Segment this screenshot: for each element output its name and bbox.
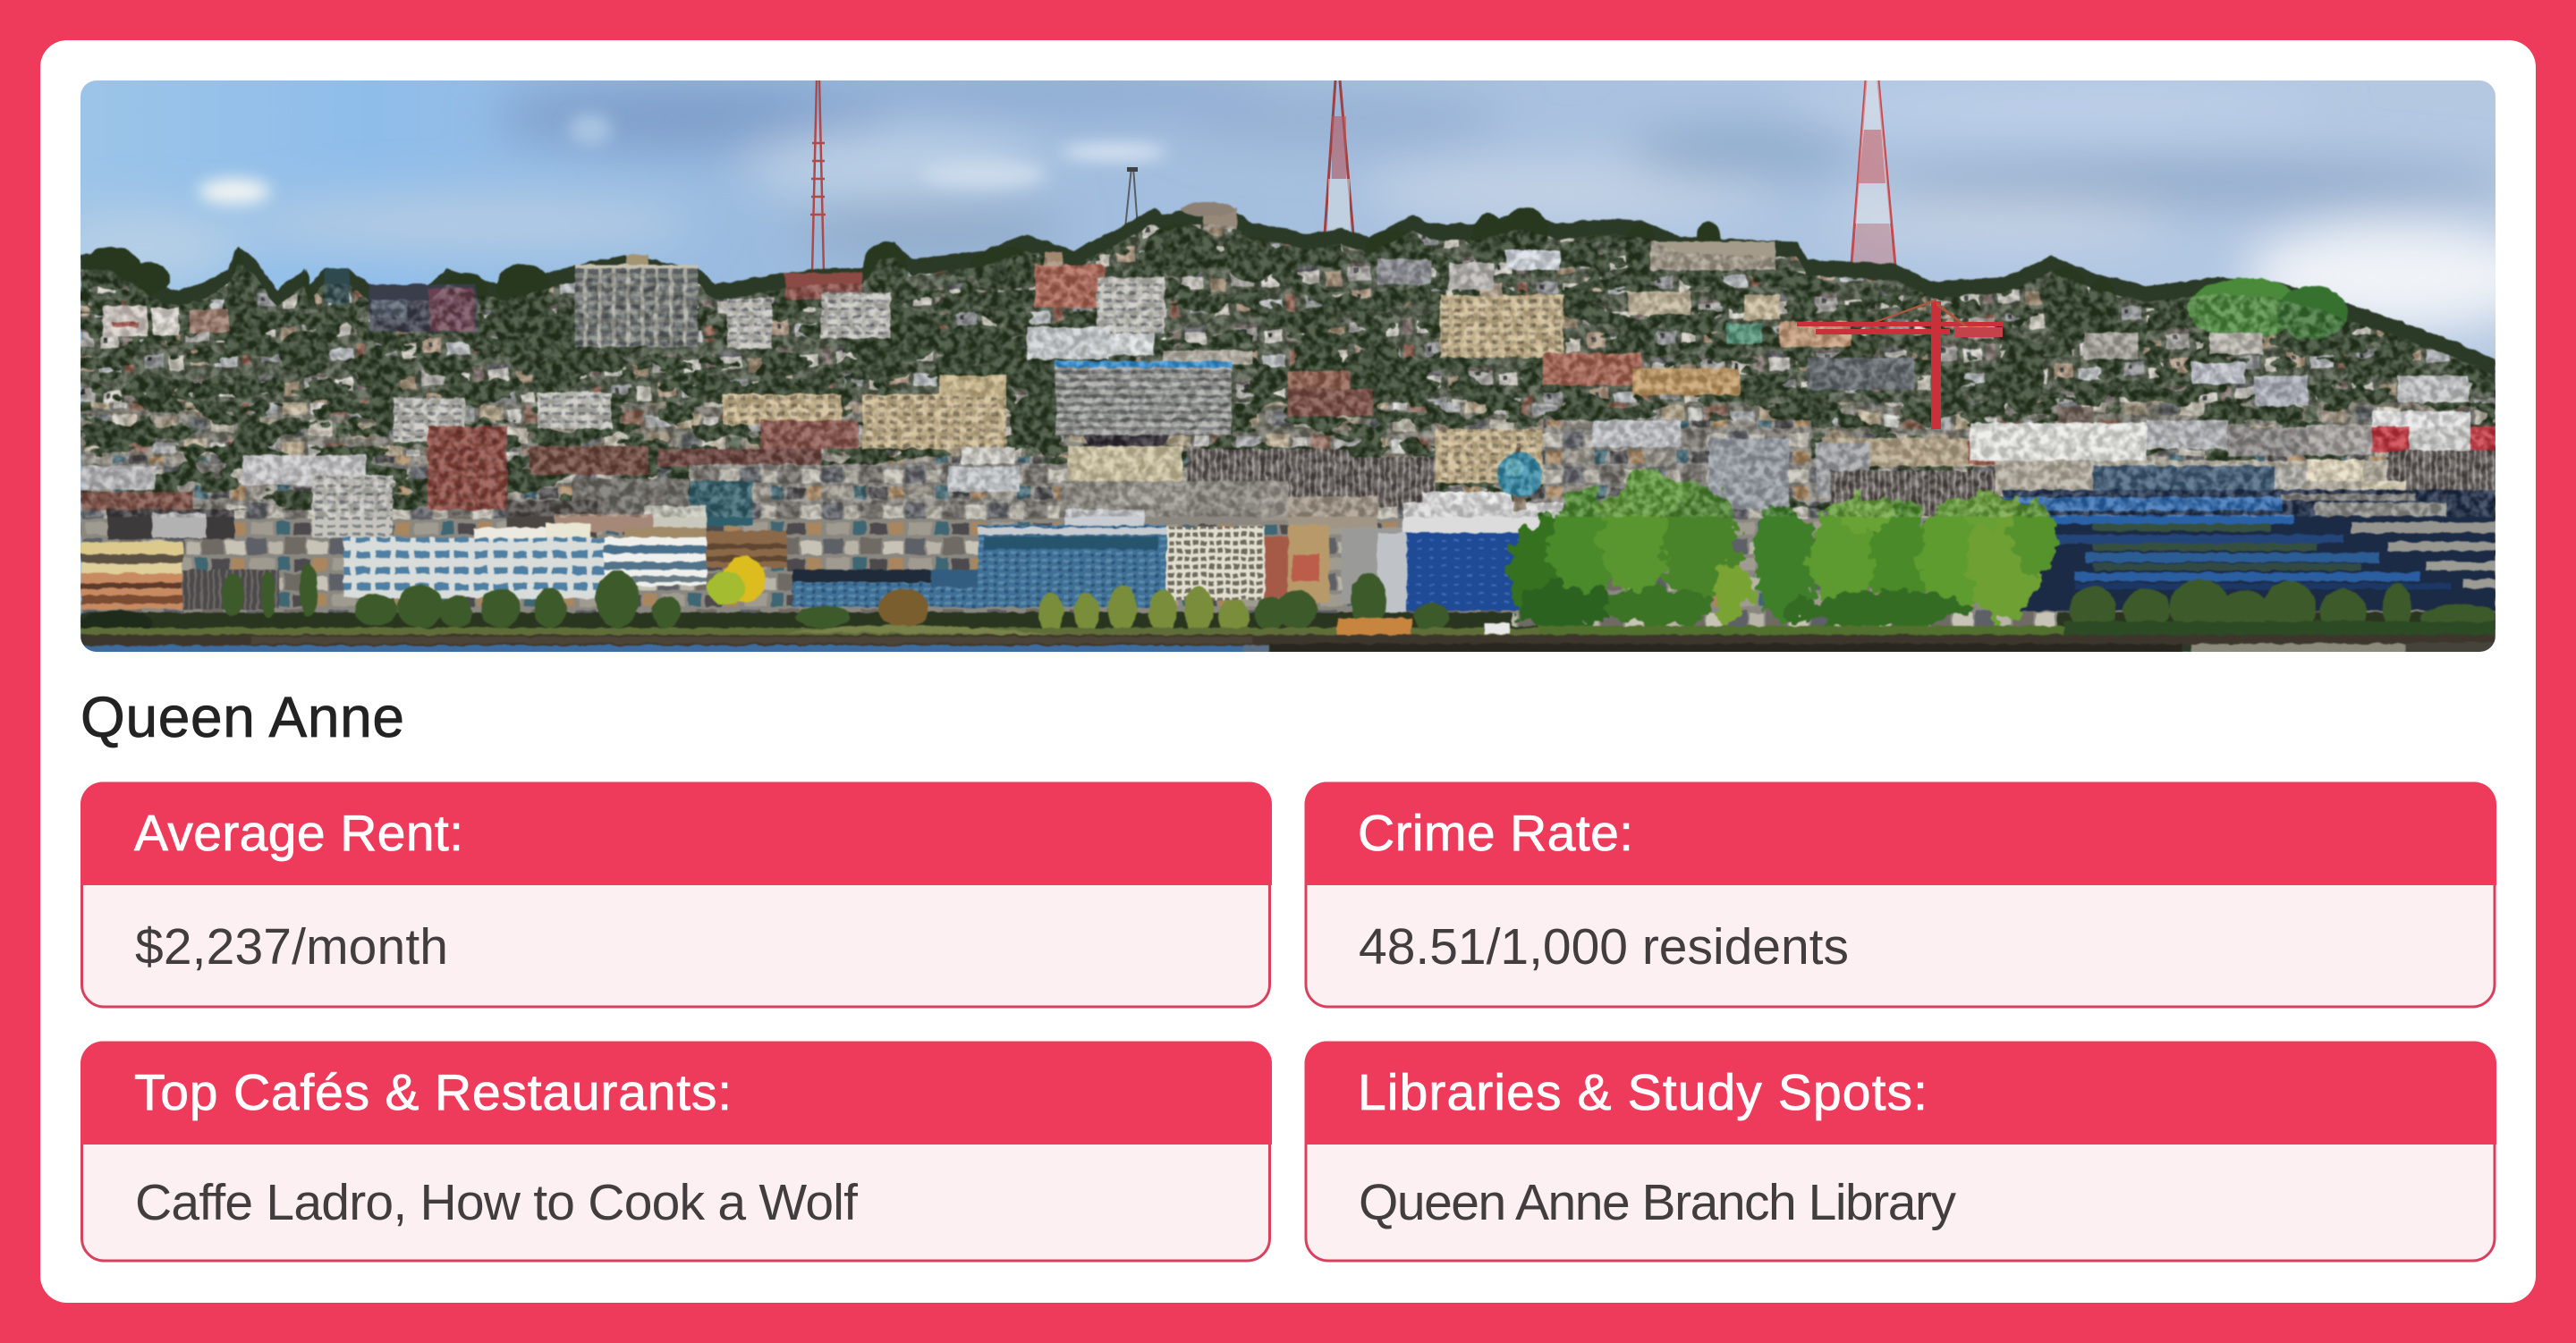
panel: top cafes and restaurants xyxy=(80,1041,1272,1261)
value: Caffe Ladro, How to Cook a Wolf xyxy=(135,1174,858,1231)
painted city scene xyxy=(80,202,2499,655)
label: Top Cafés & Restaurants: xyxy=(134,1064,732,1121)
value: Queen Anne Branch Library xyxy=(1359,1174,1957,1231)
waterfront office buildings xyxy=(80,510,1288,609)
upper and mid hillside buildings xyxy=(103,202,2469,510)
label: Crime Rate: xyxy=(1358,805,1633,862)
yellow street tree xyxy=(707,556,766,604)
hillside with trees and houses xyxy=(80,206,2496,653)
panel: libraries and study spots xyxy=(1304,1041,2496,1261)
lower city buildings xyxy=(80,407,2496,613)
scattered tree canopy xyxy=(80,206,2496,510)
neighbourhood photo xyxy=(45,72,2549,655)
label: Average Rent: xyxy=(134,805,463,862)
hillside trees xyxy=(83,207,2348,458)
panel: average rent xyxy=(80,781,1272,1007)
fine mottled grain over the city xyxy=(80,224,2496,519)
value: 48.51/1,000 residents xyxy=(1359,918,1849,976)
value: $2,237/month xyxy=(135,918,448,976)
shoreline trees and grass xyxy=(80,563,2499,638)
terraced blue building xyxy=(2003,490,2496,611)
globe sign xyxy=(1497,443,1542,511)
panel: crime rate xyxy=(1304,781,2496,1007)
radio towers xyxy=(810,80,1896,275)
construction crane xyxy=(1797,299,2003,429)
foreground green trees xyxy=(1510,469,2055,631)
rocks and water xyxy=(80,635,2496,655)
label: Libraries & Study Spots: xyxy=(1358,1064,1928,1121)
heading: Queen Anne: Queen Anne xyxy=(80,685,404,749)
